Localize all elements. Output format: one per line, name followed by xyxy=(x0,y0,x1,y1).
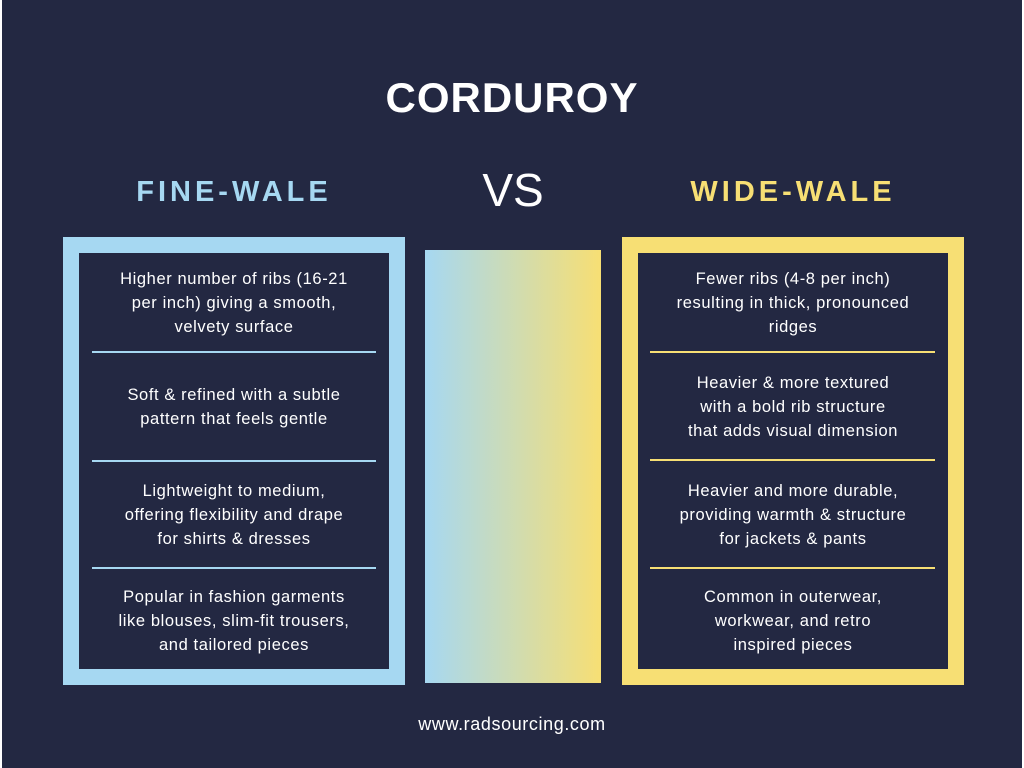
text: wide 3: Heavier and more durable, xyxy=(688,482,898,500)
text: fine 4: Popular in fashion garments xyxy=(123,588,345,606)
gradient bar xyxy=(425,250,601,683)
title: CORDUROY xyxy=(385,74,638,121)
text: wide 1: ridges xyxy=(769,318,817,336)
text: wide 4 xyxy=(704,588,882,654)
text: wide 1: Fewer ribs (4-8 per inch) xyxy=(696,270,890,288)
heading: wide-wale: WIDE-WALE xyxy=(690,176,896,208)
text: wide 2: with a bold rib structure xyxy=(700,398,886,416)
text: wide 4: inspired pieces xyxy=(733,636,853,654)
text: fine 3 xyxy=(125,482,343,548)
text: wide 3: for jackets & pants xyxy=(719,530,867,548)
text: wide 2: Heavier & more textured xyxy=(697,374,889,392)
text: fine 1: velvety surface xyxy=(174,318,294,336)
text: wide 4: Common in outerwear, xyxy=(704,588,882,606)
text: fine 4: and tailored pieces xyxy=(159,636,309,654)
text: fine 1: per inch) giving a smooth, xyxy=(132,294,336,312)
text: wide 3: providing warmth & structure xyxy=(680,506,906,524)
text: wide 2: that adds visual dimension xyxy=(688,422,898,440)
text: wide 1 xyxy=(677,270,909,336)
text: fine 2 xyxy=(127,386,341,428)
text: wide 4: workwear, and retro xyxy=(715,612,871,630)
text: fine 3: for shirts & dresses xyxy=(157,530,311,548)
text: fine 3: offering flexibility and drape xyxy=(125,506,343,524)
text: fine 1: Higher number of ribs (16-21 xyxy=(120,270,348,288)
heading: vs: VS xyxy=(482,164,544,216)
text: fine 4 xyxy=(118,588,350,654)
heading: fine-wale: FINE-WALE xyxy=(136,176,332,208)
panel: fine-wale xyxy=(63,237,405,685)
text: wide 1: resulting in thick, pronounced xyxy=(677,294,909,312)
text: fine 1 xyxy=(120,270,348,336)
footer url: www.radsourcing.com xyxy=(418,714,606,734)
panel: wide-wale xyxy=(622,237,964,685)
text: fine 2: pattern that feels gentle xyxy=(140,410,328,428)
text: fine 2: Soft & refined with a subtle xyxy=(127,386,341,404)
text: wide 2 xyxy=(688,374,898,440)
text: fine 3: Lightweight to medium, xyxy=(143,482,325,500)
text: wide 3 xyxy=(680,482,906,548)
text: fine 4: like blouses, slim-fit trousers, xyxy=(118,612,350,630)
